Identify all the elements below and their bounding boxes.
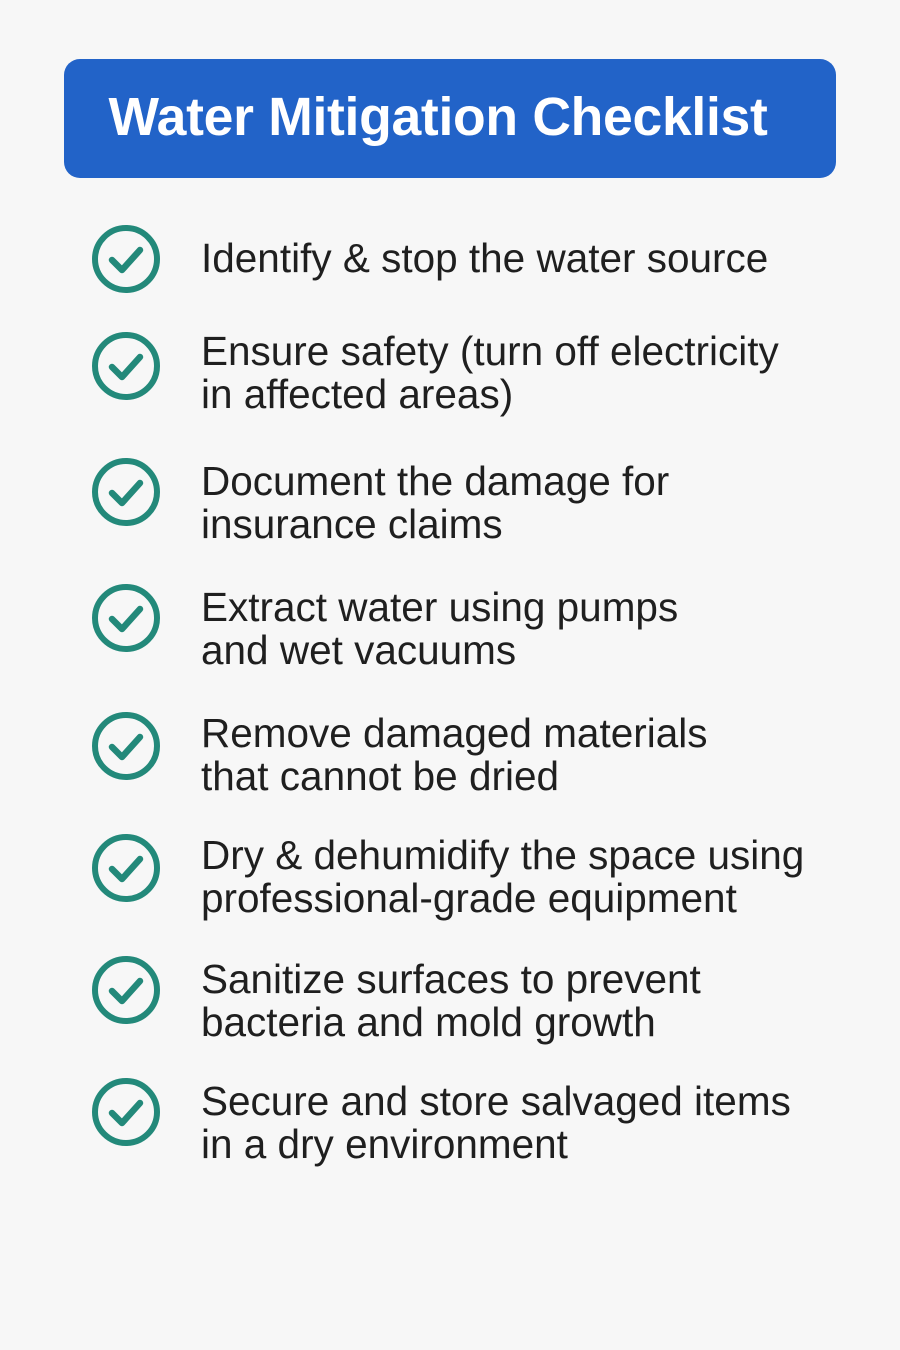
item 5 [92, 710, 708, 799]
item 6 [92, 832, 804, 921]
text [201, 458, 669, 547]
text: bacteria and mold growth [201, 999, 656, 1045]
text [201, 832, 804, 921]
item 7 [92, 956, 701, 1045]
text: and wet vacuums [201, 627, 516, 673]
text [201, 956, 701, 1045]
text [201, 584, 678, 673]
item 1 [92, 225, 768, 293]
icon: check circle [92, 1078, 160, 1146]
title banner [64, 59, 836, 178]
text: professional-grade equipment [201, 875, 737, 921]
text: Ensure safety (turn off electricity [201, 328, 779, 374]
item 8 [92, 1078, 791, 1167]
text [201, 1078, 791, 1167]
icon: check circle [92, 458, 160, 526]
icon: check circle [92, 584, 160, 652]
item 4 [92, 584, 678, 673]
icon: check circle [92, 712, 160, 780]
icon: check circle [92, 332, 160, 400]
title banner: Water Mitigation Checklist [108, 88, 768, 147]
text: insurance claims [201, 501, 503, 547]
icon: check circle [92, 225, 160, 293]
text: Dry & dehumidify the space using [201, 832, 804, 878]
text: in a dry environment [201, 1121, 568, 1167]
item 3 [92, 458, 669, 547]
text [201, 328, 779, 417]
text [201, 710, 708, 799]
text: Remove damaged materials [201, 710, 708, 756]
text: Extract water using pumps [201, 584, 678, 630]
text: in affected areas) [201, 371, 513, 417]
icon: check circle [92, 834, 160, 902]
item 2 [92, 328, 779, 417]
text: Identify & stop the water source [201, 235, 768, 281]
text: that cannot be dried [201, 753, 559, 799]
text: Document the damage for [201, 458, 669, 504]
text: Secure and store salvaged items [201, 1078, 791, 1124]
text: Sanitize surfaces to prevent [201, 956, 701, 1002]
icon: check circle [92, 956, 160, 1024]
